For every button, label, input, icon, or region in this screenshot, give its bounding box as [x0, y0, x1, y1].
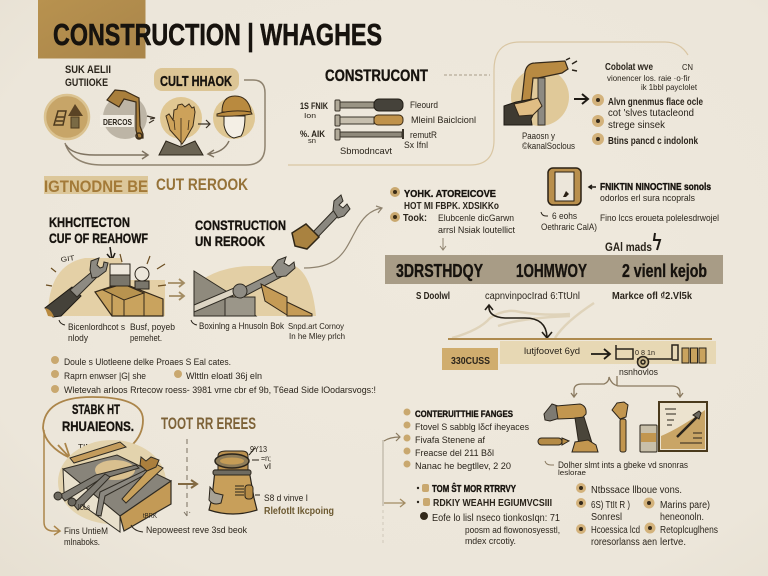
panel: construction reroof illustration: UN REROOK: [195, 233, 265, 249]
labels under illustrations: Bicenlordhcot s: [68, 322, 125, 332]
panel: icon bullets: roresorlanss aen: [591, 537, 657, 548]
illustration: wrench and toolbox: [45, 254, 166, 317]
illustration: beams and wrench: [194, 257, 316, 316]
panel: device note: 6 eohs: [552, 211, 577, 222]
panel: tool table: CONSTRUCONT: [325, 67, 428, 85]
labels under illustrations: In he Mley prlch: [289, 331, 345, 341]
panel: toot rr erees: [161, 414, 334, 517]
illustration: toolbox: [54, 440, 171, 532]
panel: bottom right list: Freacse del 211 Bδl: [415, 448, 494, 459]
panel: stark toolbox: TINil: [78, 443, 95, 452]
labels under illustrations: Busf, poyeb: [130, 322, 175, 332]
icon: certificate: [659, 402, 707, 451]
bullet list: notes: [51, 356, 376, 396]
panel: architecture illustration: CUF OF REAHOWF: [49, 230, 148, 246]
arrow: [107, 247, 115, 260]
tool: bit one: [335, 99, 403, 111]
title banner: CONSTRUCTION | WHAGHES: [53, 17, 382, 52]
panel: construction reroof illustration: CONSTRUCTION: [195, 217, 286, 233]
panel: nail gun notes: ©kanalSoclous: [522, 141, 575, 151]
section heading: IGTNODNE BE: [44, 177, 148, 196]
panel: stark toolbox: STABK HT: [72, 401, 120, 417]
panel: stark toolbox: mlnaboks.: [64, 537, 100, 547]
panel: process strip: 0 8 1n: [635, 350, 655, 357]
label box: 330CUSS: [451, 355, 490, 367]
panel: stark toolbox: [43, 397, 247, 547]
panel: bottom right list: Nanac he begtllev, 2 20: [415, 461, 511, 472]
connector loop: [65, 80, 265, 165]
bullet icons: [592, 94, 604, 145]
panel: nail gun notes: CN: [682, 63, 693, 72]
panel: roadmap list: mdex crcotiy.: [465, 536, 516, 547]
panel: toot rr erees: =n;: [261, 454, 271, 463]
panel: cult hhaok process: SUK AELII: [65, 64, 111, 76]
panel: nail gun notes: strege sinsek: [608, 119, 666, 131]
labels under illustrations: [59, 320, 345, 343]
curved black arrow: [485, 305, 552, 338]
icon: hard hat worker: [213, 96, 255, 139]
panel: nail gun notes: Alvn gnenmus flace ocle: [608, 96, 703, 108]
arrow: [589, 185, 596, 189]
arrow into list: [384, 433, 400, 441]
panel: cult hhaok process: [45, 64, 265, 165]
stat band: 2 vienl kejob: [622, 261, 707, 281]
panel: tool icons: leslorae: [558, 470, 586, 477]
panel: roadmap list: RDKIY WEAHH EGIUMVCSIII: [433, 498, 552, 509]
callout bubble: [43, 397, 143, 458]
labels under illustrations: Boxinlng a Hnusoln Bok: [199, 321, 284, 331]
icon: drill: [538, 404, 598, 452]
panel: toot rr erees: TOOT RR EREES: [161, 414, 256, 433]
tool: bit three: [335, 129, 404, 140]
panel: construction reroof illustration: [59, 195, 350, 343]
section heading: CUT REROOK: [156, 175, 249, 194]
labels under illustrations: pemehet.: [130, 333, 162, 343]
panel: tool table: Fleourd: [410, 100, 438, 111]
curved connector arrow: [304, 206, 382, 268]
panel: cult hhaok process: GUTIIOKE: [65, 77, 108, 89]
icon: pipe wrench with dercos label: DERCOS: [103, 117, 132, 127]
panel: tool icons: Dolher slmt ints a gbeke vd snonras: [558, 460, 688, 470]
arrow: [440, 238, 446, 250]
bullet list: notes: Doule s Ulotleene delke Proaes S Eal cates.: [64, 357, 231, 368]
panel: key facts: [390, 187, 515, 250]
tool: bit two: [335, 115, 403, 126]
icon: canister: [209, 451, 257, 514]
panel: bottom right list: Fivafa Stenene af: [415, 435, 485, 446]
stat band: capnvinpocIrad 6:TtUnl: [485, 291, 580, 302]
arrow: [384, 499, 405, 507]
panel: tool table: %. AIK: [300, 129, 325, 140]
panel: key facts: YOHK. ATOREICOVE: [404, 188, 496, 200]
panel: icon bullets: Marins pare): [660, 500, 710, 511]
panel: key facts: Elubcenle dicGarwn: [438, 213, 514, 224]
panel: device note: GAl mads: [605, 240, 652, 254]
panel: tool table: Sbmodncavt: [340, 146, 392, 157]
panel: device note: Fino lccs eroueta polelesdrwojel: [600, 213, 719, 224]
arrow: [178, 480, 197, 488]
bullet list: notes: Wletevah arloos Rrtecow roess- 3981 vrne cbr ef 9b, T6ead Side lOodarsvogs:!: [64, 385, 376, 396]
panel: tool table: Mleinl Baiclcionl: [411, 115, 476, 126]
dashed arrow: [184, 439, 190, 516]
panel: toot rr erees: 9Y13: [250, 445, 267, 454]
panel: stark toolbox: tBRK: [143, 513, 157, 520]
bullet list: notes: Wlttln eloatl 36j eln: [186, 371, 262, 382]
stat band: [385, 255, 723, 302]
panel: device note: odorlos erl sura ncoprals: [600, 193, 695, 204]
title banner: [38, 0, 382, 58]
panel: process strip: [442, 303, 716, 397]
panel: roadmap list: [384, 482, 560, 547]
panel: stark toolbox: RHUAIEONS.: [62, 418, 134, 434]
branching arrows: [571, 376, 683, 397]
panel: icon bullets: lertve.: [660, 537, 686, 548]
panel: bottom right list: [384, 408, 529, 472]
panel: icon bullets: Retoplcuglhens: [660, 525, 718, 536]
icon: large wrench: [292, 195, 350, 249]
panel: roadmap list: poosm ad flowonosyesstl,: [465, 525, 560, 536]
panel: nail gun notes: [504, 58, 703, 151]
panel: stark toolbox: Nepoweest reve 3sd beok: [146, 525, 247, 536]
labels under illustrations: Snpd.art Cornoy: [288, 321, 345, 331]
panel: toot rr erees: S8 d vinve I: [264, 493, 308, 504]
panel: tool table: Ion: [304, 113, 316, 120]
panel: toot rr erees: vl: [264, 462, 271, 471]
icon: wrench: [612, 402, 628, 452]
panel: bottom right list: Ftovel S sabblg lδcf iheyaces: [415, 422, 529, 433]
panel: toot rr erees: Rlefotlt Ikcpoing: [264, 506, 334, 517]
arrow: [574, 94, 588, 104]
pill heading: CULT HHAOK: [160, 73, 232, 90]
arrows between illustrations: [168, 279, 184, 300]
arrow: [208, 141, 229, 157]
panel: nail gun notes: vionencer los. raie ·o·fir: [607, 73, 690, 83]
panel: key facts: arrsl Nsiak loutellict: [438, 225, 515, 236]
pill heading: [154, 68, 239, 91]
panel: icon bullets: Hcoessica lcd: [591, 525, 640, 536]
panel: tool table: [300, 67, 490, 157]
bars: [682, 348, 706, 363]
panel: stark toolbox: IOLs: [78, 503, 90, 512]
panel: icon bullets: 6S) TtIt R ): [591, 500, 630, 511]
panel: nail gun notes: ik 1bbl paycIolet: [641, 82, 698, 92]
labels under illustrations: nlody: [68, 333, 88, 343]
panel: process strip: nsnhovlos: [619, 367, 658, 377]
panel: device note: [541, 168, 719, 254]
panel: device note: Oethraric CalA): [541, 222, 597, 233]
arrow to hands: [66, 145, 148, 159]
stat band: S Doolwl: [416, 291, 450, 302]
panel: tool table: 1S FNIK: [300, 101, 328, 112]
panel: nail gun notes: cot 'slves tutacleond: [608, 107, 694, 119]
panel: tool table: remutR: [410, 130, 437, 141]
label box: [442, 348, 498, 370]
section heading: [44, 175, 249, 196]
panel: tool table: sn: [308, 138, 316, 145]
panel: process strip: lutjfoovet 6yd: [524, 346, 580, 357]
icon: device frame: [548, 168, 581, 205]
stat band: 1OHMWOY: [516, 261, 587, 281]
icon: badge: [45, 95, 89, 139]
panel: nail gun notes: Paaosn y: [522, 131, 555, 141]
panel: bottom right list: CONTERUITTHIE FANGES: [415, 409, 513, 420]
icon: hands: [159, 97, 203, 155]
panel: icon bullets: Sonresl: [591, 512, 622, 523]
panel: icon bullets: Ntbssace llboue vons.: [591, 485, 682, 496]
panel: key facts: HOT MI FBPK. XDSIKKo: [404, 200, 499, 212]
machine: [616, 345, 678, 368]
debris: [566, 58, 577, 71]
panel: architecture illustration: GIT: [60, 255, 76, 264]
panel: stark toolbox: Fins UntieM: [64, 526, 108, 536]
panel: roadmap list: TOM ŜT MOR RTRRVY: [432, 482, 516, 495]
panel: icon bullets: [576, 483, 718, 548]
icon: box: [640, 425, 657, 452]
stat band: 3DRSTHDQY: [396, 261, 483, 281]
panel: architecture illustration: KHHCITECTON: [49, 214, 130, 230]
panel: nail gun notes: Btins pancd c indolonk: [608, 135, 698, 147]
arrow: [591, 349, 610, 359]
panel: nail gun notes: Cobolat wve: [605, 62, 653, 73]
stat band: Markce ofl ₫2.Vl5k: [612, 291, 692, 302]
icon: nail gun: [504, 61, 569, 126]
panel: device note: FNIKTIN NINOCTINE sonols: [600, 182, 711, 193]
arrow: [198, 120, 210, 128]
bullet list: notes: Raprn enwser |G| she: [64, 371, 146, 382]
panel: key facts: Took:: [403, 212, 427, 224]
panel: tool icons: [538, 402, 707, 477]
arrow: [147, 116, 155, 123]
panel: icon bullets: heneonoln.: [660, 512, 704, 523]
icon: pipe wrench with dercos label: [100, 90, 147, 139]
icon: lightning: [654, 233, 660, 250]
panel: roadmap list: Eofe lo lisl nseco tionkosIqn: 71: [432, 513, 560, 524]
panel: architecture illustration: [45, 214, 184, 317]
panel: tool table: Sx Ifnl: [404, 140, 428, 151]
